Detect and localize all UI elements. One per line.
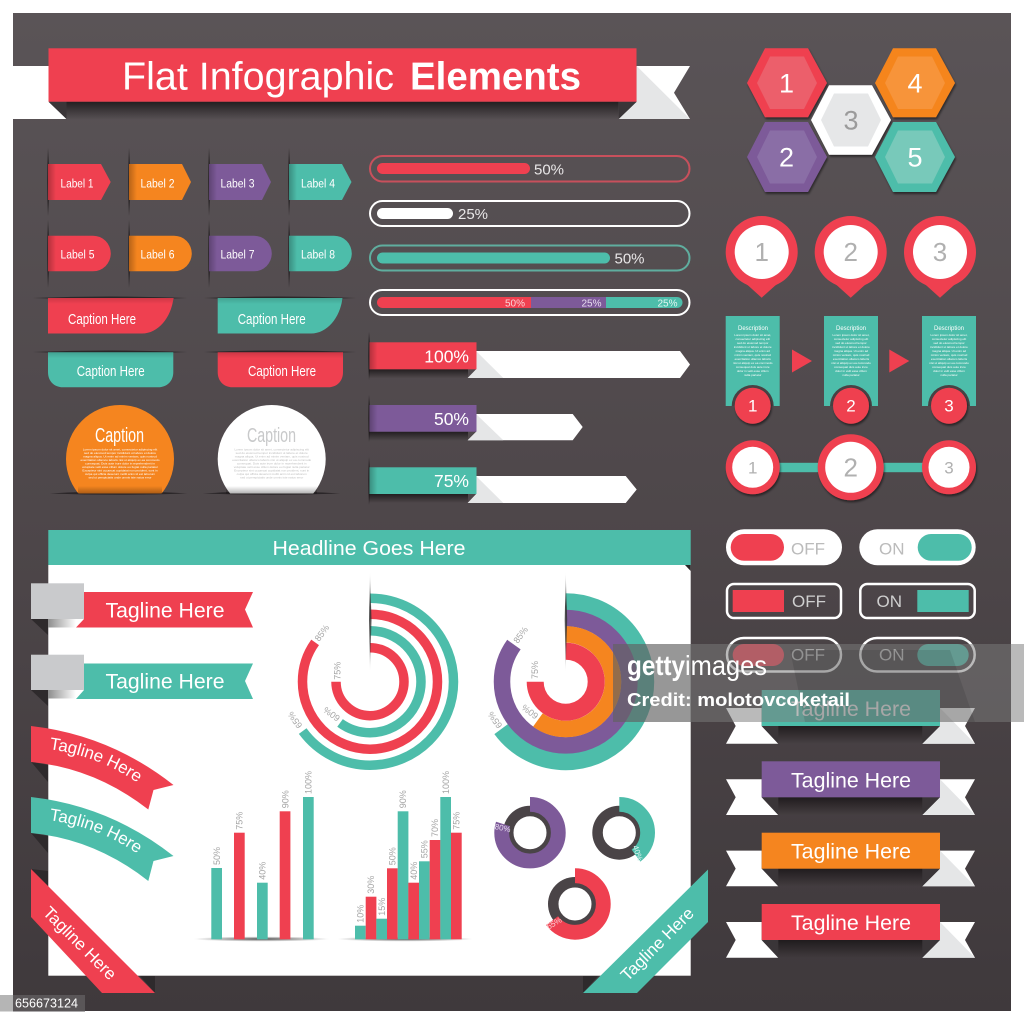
step card 2: incididunt ut labore et dolore bbox=[832, 345, 870, 349]
pin 1 bbox=[726, 216, 798, 298]
step card 1 bbox=[726, 316, 780, 424]
step card 3: Lorem ipsum dolor sit amet, bbox=[930, 333, 968, 337]
ribbon orange bbox=[726, 833, 975, 886]
donut teal 40% bbox=[591, 804, 648, 862]
progress stacked: 25% bbox=[582, 298, 602, 310]
arrow 2 bbox=[889, 350, 909, 372]
bar chart simple: 90% bbox=[280, 790, 290, 808]
description steps bbox=[726, 316, 976, 424]
toggle off square bbox=[727, 584, 841, 618]
progress 50% teal: 50% bbox=[614, 250, 645, 268]
label tabs bbox=[47, 148, 352, 288]
white caption circle: Caption bbox=[247, 425, 296, 447]
bar chart grouped: 100% bbox=[441, 771, 451, 794]
curved ribbon red: Tagline Here bbox=[51, 738, 140, 782]
hexagon 2 bbox=[747, 122, 827, 192]
step card 2: consequat duis aute irure bbox=[834, 365, 868, 369]
hexagon cluster bbox=[747, 48, 955, 192]
white caption circle: sed do eiusmod tempor incididunt ut labore et dolore bbox=[236, 451, 308, 455]
step card 3: exercitation ullamco laboris bbox=[931, 357, 968, 361]
percent arrow bars bbox=[368, 332, 690, 505]
toggle on outline: ON bbox=[879, 646, 904, 664]
ribbon teal bbox=[726, 690, 975, 744]
ribbon teal: Tagline Here bbox=[791, 698, 911, 721]
progress 50% red bbox=[370, 156, 690, 182]
bar chart simple: 50% bbox=[212, 847, 222, 865]
bar chart grouped: 50% bbox=[388, 847, 398, 865]
orange caption circle: voluptate velit esse cillum dolore eu fugiat nulla pariatur bbox=[82, 465, 158, 469]
arrow 1 bbox=[792, 350, 812, 372]
step card 3: magna aliqua. Ut enim ad bbox=[932, 349, 966, 353]
title banner: Flat Infographic bbox=[122, 55, 394, 98]
connected steps timeline bbox=[726, 434, 976, 500]
caption red square bbox=[48, 298, 174, 334]
caption red square: Caption Here bbox=[68, 312, 136, 328]
pin 1: 1 bbox=[754, 237, 769, 267]
step card 3: sed do eiusmod tempor bbox=[933, 341, 965, 345]
bar chart grouped: 90% bbox=[398, 790, 408, 808]
orange caption circle: consequat. Duis aute irure dolor in reprehenderit in bbox=[85, 462, 155, 466]
radial ring chart solid: 85% bbox=[511, 625, 530, 645]
radial ring chart lines: 75% bbox=[332, 662, 342, 680]
bar 100% bbox=[369, 342, 690, 378]
step card 2: Description bbox=[836, 325, 866, 332]
donut teal 40%: 40% bbox=[631, 844, 644, 862]
node 3: 3 bbox=[944, 458, 954, 478]
step card 2: exercitation ullamco laboris bbox=[833, 357, 870, 361]
toggle off outline bbox=[727, 638, 841, 672]
title banner: Elements bbox=[410, 55, 581, 98]
label 8: Label 8 bbox=[301, 248, 335, 262]
step card 1: consectetur adipiscing elit bbox=[736, 337, 770, 341]
progress 50% teal bbox=[370, 246, 690, 270]
orange caption circle: magna aliqua. Ut enim ad minim veniam, quis nostrud bbox=[83, 454, 157, 458]
caption red rounded: Caption Here bbox=[248, 364, 316, 380]
caption teal square bbox=[218, 298, 343, 334]
bar chart simple: 100% bbox=[304, 771, 314, 794]
white caption circle: consequat. Duis aute irure dolor in reprehenderit in bbox=[237, 462, 307, 466]
toggle on pill bbox=[859, 529, 976, 565]
curved ribbon teal: Tagline Here bbox=[51, 808, 140, 852]
toggle on square bbox=[860, 584, 975, 618]
bar chart simple: 40% bbox=[258, 862, 268, 880]
label 7 bbox=[209, 236, 272, 271]
step card 1: minim veniam, quis nostrud bbox=[734, 353, 771, 357]
step card 1: sed do eiusmod tempor bbox=[737, 341, 768, 345]
ribbon orange: Tagline Here bbox=[791, 841, 911, 864]
tagline flag teal bbox=[31, 655, 253, 706]
bar chart grouped: 55% bbox=[420, 840, 430, 858]
step card 2: nisi ut aliquip ex ea commodo bbox=[831, 361, 871, 365]
image id tag: 656673124 bbox=[15, 996, 78, 1010]
ribbon purple: Tagline Here bbox=[791, 769, 911, 792]
title banner bbox=[13, 48, 690, 120]
bar chart grouped: 70% bbox=[430, 819, 440, 837]
donut red 65% bbox=[545, 876, 603, 932]
white caption circle: Excepteur sint occaecat cupidatat non proident, sunt in bbox=[234, 468, 310, 472]
progress bars bbox=[370, 156, 690, 315]
step card 1: 1 bbox=[748, 396, 757, 416]
hexagon 2: 2 bbox=[779, 142, 794, 172]
orange caption circle: Excepteur sint occaecat cupidatat non proident, sunt in bbox=[82, 468, 158, 472]
label 1 bbox=[48, 164, 111, 200]
step card 2: magna aliqua. Ut enim ad bbox=[834, 349, 868, 353]
caption teal rounded bbox=[48, 352, 173, 387]
step card 3: consequat duis aute irure bbox=[932, 365, 966, 369]
hexagon 3 bbox=[811, 85, 891, 155]
label 5: Label 5 bbox=[60, 248, 95, 262]
pin 2: 2 bbox=[843, 237, 858, 267]
label 8 bbox=[289, 236, 352, 271]
label 3 bbox=[209, 164, 271, 200]
label 4 bbox=[289, 164, 352, 200]
step card 1: exercitation ullamco laboris bbox=[735, 357, 771, 361]
pin 3: 3 bbox=[933, 237, 947, 267]
step card 1: dolor in velit esse cillum bbox=[737, 369, 769, 373]
white caption circle: sed ut perspiciatis unde omnis iste natus error bbox=[240, 476, 303, 480]
bar chart simple: 75% bbox=[235, 812, 245, 830]
hexagon 5: 5 bbox=[907, 142, 923, 172]
bar 100%: 100% bbox=[424, 347, 469, 367]
tagline flag teal: Tagline Here bbox=[106, 670, 224, 693]
corner ribbon teal: Tagline Here bbox=[617, 904, 698, 985]
step card 3: consectetur adipiscing elit bbox=[932, 337, 966, 341]
step card 3: minim veniam, quis nostrud bbox=[931, 353, 968, 357]
donut purple 80%: 80% bbox=[494, 822, 511, 834]
caption teal rounded: Caption Here bbox=[77, 364, 145, 380]
pin 3 bbox=[904, 216, 976, 298]
watermark band: getty bbox=[627, 650, 685, 681]
bar chart grouped bbox=[337, 771, 473, 942]
caption tabs bbox=[33, 296, 356, 387]
step card 3: dolor in velit esse cillum bbox=[933, 369, 965, 373]
label 3: Label 3 bbox=[220, 176, 255, 190]
progress stacked: 25% bbox=[658, 298, 678, 310]
label 4: Label 4 bbox=[301, 176, 335, 190]
bar 75% bbox=[369, 467, 637, 503]
progress 25% white: 25% bbox=[458, 206, 488, 223]
step card 2: consectetur adipiscing elit bbox=[834, 337, 868, 341]
progress 25% white bbox=[370, 201, 690, 226]
bar 75%: 75% bbox=[434, 471, 469, 491]
step card 3: 3 bbox=[944, 396, 954, 416]
pin 2 bbox=[815, 216, 887, 298]
radial ring chart lines: 60% bbox=[321, 705, 342, 723]
label 2: Label 2 bbox=[140, 176, 175, 190]
caption red rounded bbox=[218, 352, 343, 387]
orange caption circle bbox=[52, 405, 185, 495]
watermark band bbox=[613, 644, 1024, 722]
label 2 bbox=[129, 164, 191, 200]
label 7: Label 7 bbox=[220, 248, 255, 262]
node 2: 2 bbox=[843, 452, 858, 482]
step card 2: minim veniam, quis nostrud bbox=[833, 353, 870, 357]
radial ring chart solid: 60% bbox=[520, 702, 540, 721]
step card 3: nulla pariatur bbox=[940, 373, 958, 377]
radial ring chart solid bbox=[486, 572, 646, 762]
step card 3: nisi ut aliquip ex ea commodo bbox=[929, 361, 969, 365]
orange caption circle: sed do eiusmod tempor incididunt ut labore et dolore bbox=[84, 451, 156, 455]
hexagon 5 bbox=[875, 122, 955, 192]
bar chart grouped: 75% bbox=[452, 812, 462, 830]
toggle on outline bbox=[860, 638, 975, 672]
curved ribbon red bbox=[31, 726, 174, 810]
toggle off pill: OFF bbox=[791, 539, 825, 558]
bar chart grouped: 10% bbox=[356, 905, 366, 923]
step card 2: 2 bbox=[846, 396, 856, 416]
toggle on pill: ON bbox=[879, 539, 904, 558]
ribbon red bbox=[726, 904, 975, 958]
toggle on square: ON bbox=[876, 592, 902, 611]
corner ribbon red bbox=[31, 869, 155, 993]
node 1 bbox=[726, 440, 780, 494]
bar chart simple bbox=[194, 771, 330, 942]
map pins bbox=[726, 216, 976, 298]
corner ribbon red: Tagline Here bbox=[39, 903, 120, 984]
bar chart grouped: 40% bbox=[409, 862, 419, 880]
caption teal square: Caption Here bbox=[238, 312, 306, 328]
orange caption circle: Lorem ipsum dolor sit amet, consectetur adipiscing elit bbox=[83, 448, 157, 452]
white caption circle bbox=[205, 405, 338, 495]
step card 1: Lorem ipsum dolor sit amet, bbox=[734, 333, 771, 337]
label 1: Label 1 bbox=[60, 176, 94, 190]
white caption circle: voluptate velit esse cillum dolore eu fugiat nulla pariatur bbox=[234, 465, 310, 469]
ribbon purple bbox=[726, 761, 975, 815]
step card 3: incididunt ut labore et dolore bbox=[930, 345, 968, 349]
progress stacked bbox=[370, 290, 690, 315]
node 2 bbox=[818, 434, 884, 500]
step card 1: consequat duis aute irure bbox=[736, 365, 770, 369]
hexagon 3: 3 bbox=[843, 106, 859, 136]
step card 2 bbox=[824, 316, 878, 424]
white caption circle: magna aliqua. Ut enim ad minim veniam, quis nostrud bbox=[235, 454, 309, 458]
step card 2: Lorem ipsum dolor sit amet, bbox=[832, 333, 870, 337]
step card 1: nulla pariatur bbox=[744, 373, 761, 377]
main white panel bbox=[48, 530, 691, 976]
toggle off square: OFF bbox=[792, 592, 826, 611]
bar chart grouped: 30% bbox=[366, 876, 376, 894]
radial ring chart lines bbox=[286, 572, 454, 765]
orange caption circle: culpa qui officia deserunt mollit anim id est laborum bbox=[85, 472, 155, 476]
bar 50% bbox=[369, 405, 583, 441]
ribbon red: Tagline Here bbox=[791, 912, 911, 935]
watermark band: Credit: molotovcoketail bbox=[627, 690, 850, 710]
donut purple 80% bbox=[494, 804, 558, 861]
label 6: Label 6 bbox=[140, 248, 175, 262]
toggle off outline: OFF bbox=[791, 646, 825, 664]
hexagon 4 bbox=[875, 48, 955, 117]
main white panel: Headline Goes Here bbox=[272, 538, 466, 560]
step card 3: Description bbox=[934, 325, 964, 332]
bar chart grouped: 15% bbox=[377, 898, 387, 916]
tagline flag red: Tagline Here bbox=[106, 599, 224, 622]
watermark band: images bbox=[685, 650, 767, 681]
radial ring chart lines: 65% bbox=[286, 710, 304, 730]
image id tag bbox=[0, 995, 85, 1012]
white caption circle: exercitation ullamco laboris nisi ut aliquip ex ea commodo bbox=[232, 458, 311, 462]
corner ribbon teal bbox=[583, 870, 708, 993]
step card 1: Description bbox=[738, 325, 768, 332]
donut red 65%: 65% bbox=[545, 916, 563, 931]
step card 1: incididunt ut labore et dolore bbox=[734, 345, 772, 349]
step card 2: nulla pariatur bbox=[842, 373, 860, 377]
radial ring chart solid: 75% bbox=[530, 661, 540, 679]
hexagon 1: 1 bbox=[779, 68, 794, 98]
step card 2: sed do eiusmod tempor bbox=[835, 341, 867, 345]
orange caption circle: Caption bbox=[95, 425, 144, 447]
radial ring chart solid: 65% bbox=[486, 710, 504, 730]
toggles bbox=[726, 529, 976, 672]
step card 1: magna aliqua. Ut enim ad bbox=[736, 349, 770, 353]
label 6 bbox=[129, 236, 192, 271]
progress 50% red: 50% bbox=[534, 162, 564, 178]
label 5 bbox=[48, 236, 111, 271]
node 3 bbox=[922, 440, 976, 494]
step card 1: nisi ut aliquip ex ea commodo bbox=[733, 361, 773, 365]
bar 50%: 50% bbox=[434, 409, 469, 429]
tagline flag red bbox=[31, 583, 253, 635]
node 1: 1 bbox=[748, 458, 757, 478]
toggle off pill bbox=[726, 529, 842, 565]
curved ribbon teal bbox=[31, 797, 174, 881]
step card 2: dolor in velit esse cillum bbox=[835, 369, 867, 373]
step card 3 bbox=[922, 316, 976, 424]
white caption circle: culpa qui officia deserunt mollit anim id est laborum bbox=[237, 472, 307, 476]
orange caption circle: exercitation ullamco laboris nisi ut aliquip ex ea commodo bbox=[81, 458, 160, 462]
progress stacked: 50% bbox=[505, 298, 525, 310]
hexagon 4: 4 bbox=[907, 68, 923, 98]
hexagon 1 bbox=[747, 48, 827, 117]
white caption circle: Lorem ipsum dolor sit amet, consectetur adipiscing elit bbox=[234, 448, 309, 452]
radial ring chart lines: 85% bbox=[313, 623, 331, 643]
orange caption circle: sed ut perspiciatis unde omnis iste natus error bbox=[88, 476, 152, 480]
